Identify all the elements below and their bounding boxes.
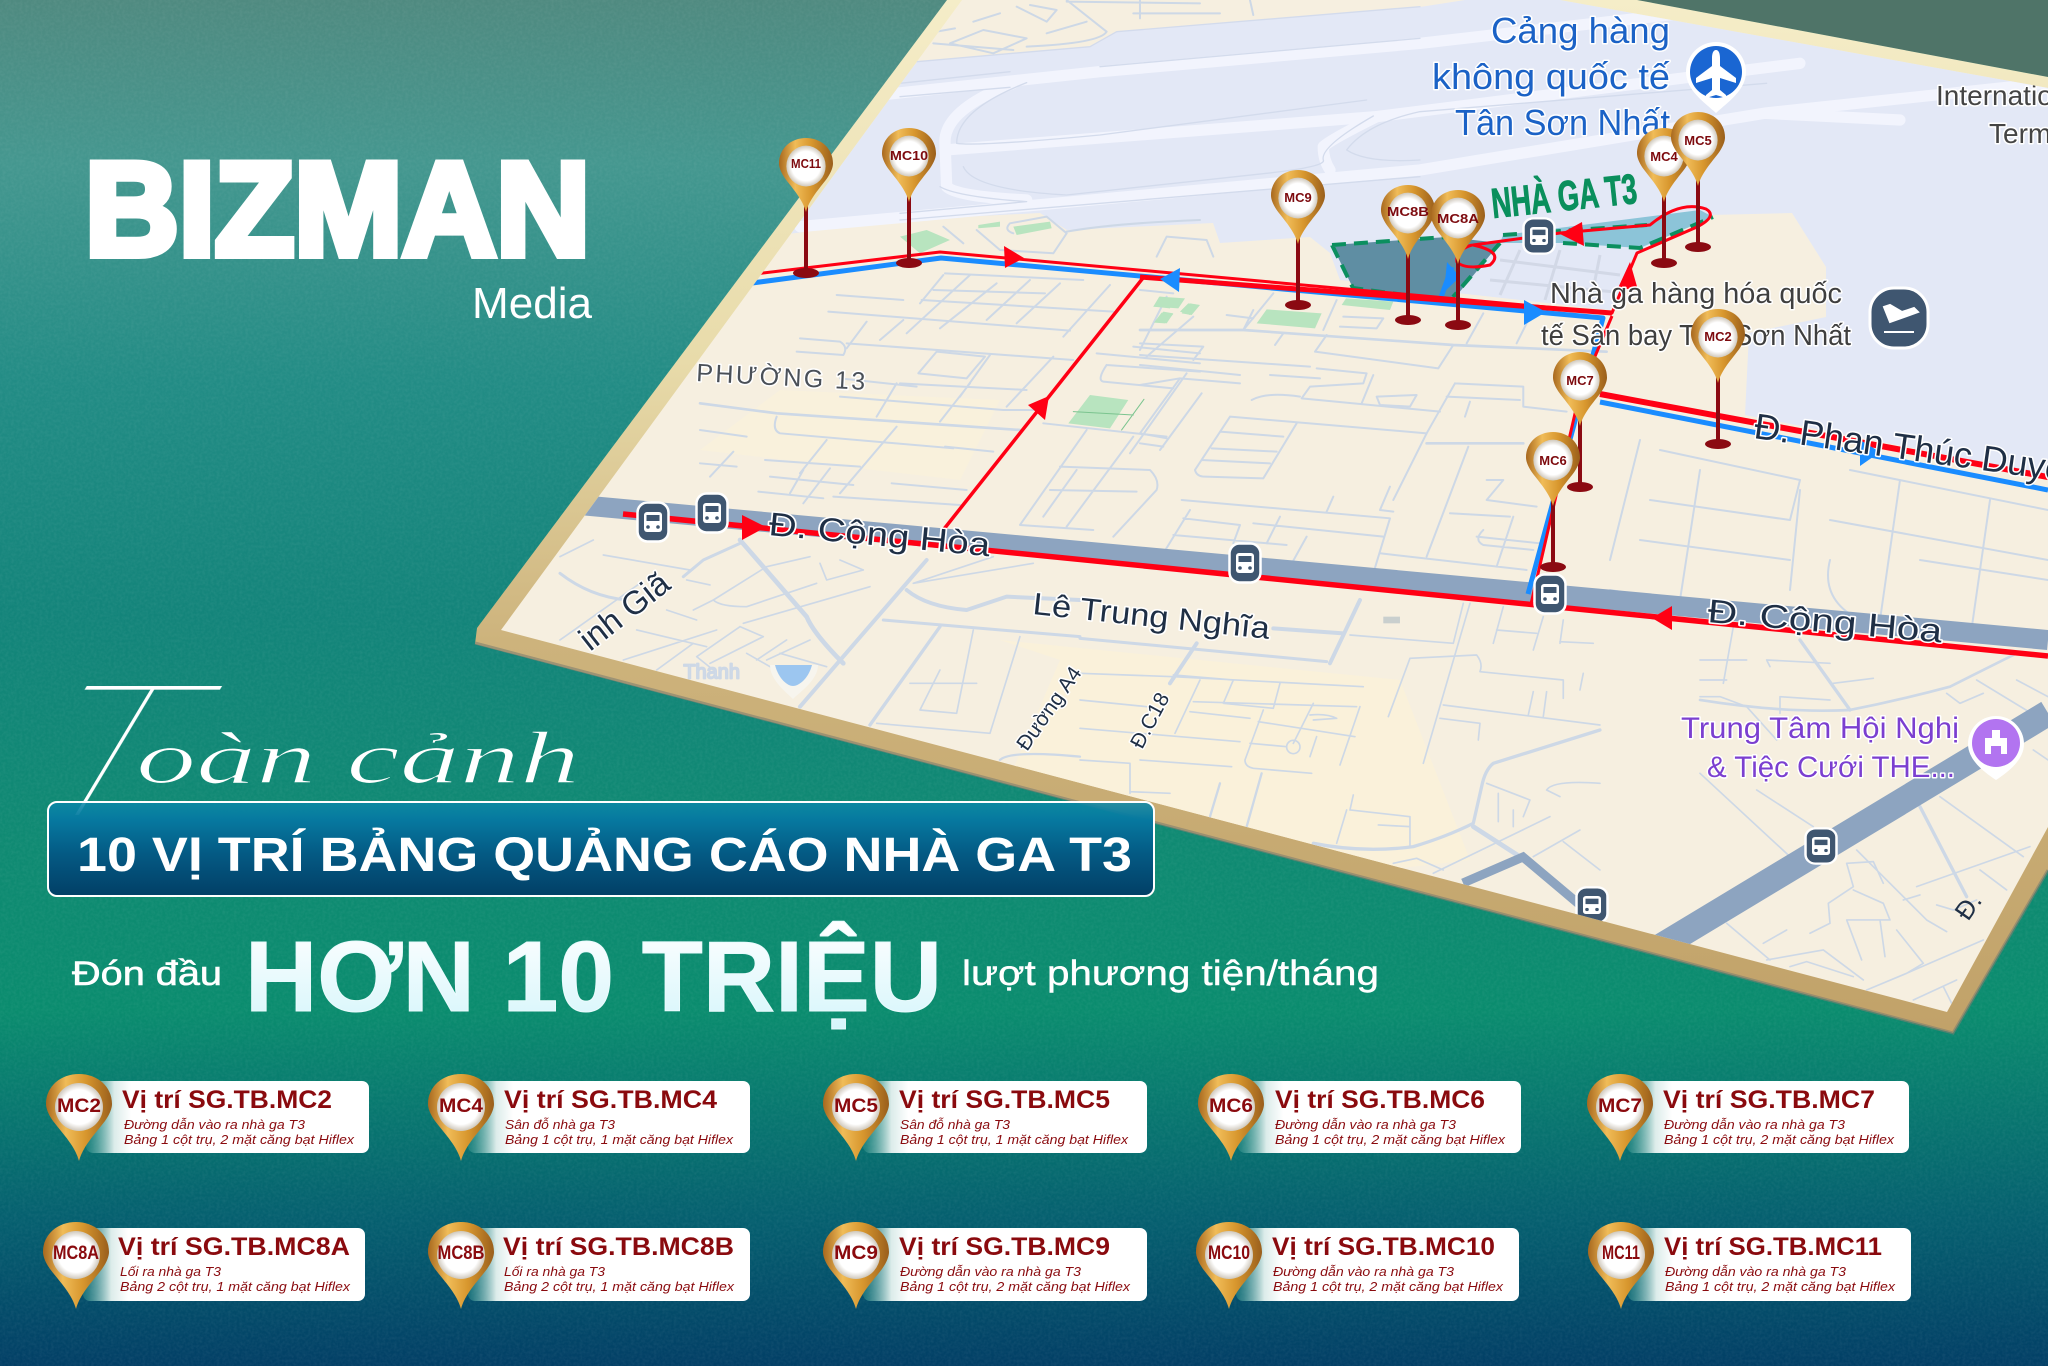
card MC8B: Bảng 2 cột trụ, 1 mặt căng bạt Hiflex [504, 1279, 735, 1294]
road and place labels [572, 10, 2048, 925]
card MC4: Vị trí SG.TB.MC4 [504, 1086, 717, 1114]
heading: Toàn cảnh [0, 636, 580, 865]
map pins [779, 112, 1745, 572]
card MC10: Bảng 1 cột trụ, 2 mặt căng bạt Hiflex [1273, 1279, 1504, 1294]
road and place labels: Lê Trung Nghĩa [1031, 586, 1272, 646]
pin MC9 [1271, 170, 1325, 310]
streets: north-east block [1140, 290, 1607, 573]
card MC9: Đường dẫn vào ra nhà ga T3 [900, 1264, 1082, 1279]
headline: đón đầu hơn 10 triệu: Đón đầu [72, 955, 222, 993]
road and place labels: & Tiệc Cưới THE... [1707, 751, 1955, 784]
card MC2: MC2 [57, 1096, 101, 1117]
card MC10: Vị trí SG.TB.MC10 [1272, 1233, 1495, 1261]
pin MC7: MC7 [1566, 373, 1594, 388]
card MC4: Sân đỗ nhà ga T3 [505, 1117, 616, 1132]
route arrows [742, 222, 1880, 630]
card MC2: Đường dẫn vào ra nhà ga T3 [124, 1117, 306, 1132]
runways and airport roads [800, 0, 2048, 257]
card MC10 [1196, 1222, 1519, 1309]
road and place labels: Đường A4 [1012, 662, 1087, 755]
icon: faint blue place marker [770, 665, 818, 699]
headline: đón đầu hơn 10 triệu: lượt phương tiện/tháng [962, 954, 1379, 993]
pin MC2 [1691, 309, 1745, 449]
card MC4: Bảng 1 cột trụ, 1 mặt căng bạt Hiflex [505, 1132, 734, 1147]
card MC2: Vị trí SG.TB.MC2 [122, 1086, 332, 1114]
pin MC10: MC10 [890, 148, 928, 163]
banner: 10 vị trí bảng quảng cáo [48, 802, 1154, 896]
pin MC6: MC6 [1539, 453, 1567, 468]
pin MC11: MC11 [791, 156, 821, 171]
icon: departures marker [1870, 288, 1928, 348]
card MC6: MC6 [1209, 1096, 1253, 1117]
streets: north-west block [700, 273, 1200, 537]
card MC2 [46, 1074, 369, 1161]
road and place labels: tế Sân bay Tân Sơn Nhất [1541, 320, 1851, 352]
card MC11 [1588, 1222, 1911, 1309]
card MC5: Vị trí SG.TB.MC5 [899, 1086, 1110, 1114]
card MC7: Vị trí SG.TB.MC7 [1663, 1086, 1875, 1114]
pin MC11 [779, 138, 833, 278]
pin MC8B: MC8B [1387, 204, 1429, 219]
airport area [780, 0, 2048, 475]
card MC11: MC11 [1602, 1243, 1640, 1264]
pin MC5 [1671, 112, 1725, 252]
card MC6: Đường dẫn vào ra nhà ga T3 [1275, 1117, 1457, 1132]
streets: south-east block [1700, 627, 2048, 1007]
routes [623, 207, 2048, 656]
pin MC4: MC4 [1650, 149, 1678, 164]
pin MC7 [1553, 352, 1607, 492]
card MC9: Vị trí SG.TB.MC9 [899, 1233, 1110, 1261]
road and place labels: inh Giã [572, 564, 677, 658]
card MC2: Bảng 1 cột trụ, 2 mặt căng bạt Hiflex [124, 1132, 355, 1147]
heading: Toàn cảnh: oàn cảnh [136, 718, 580, 800]
logo: BIZMAN Media: Media [472, 279, 593, 328]
card MC8B: Vị trí SG.TB.MC8B [503, 1233, 734, 1261]
card MC5: Bảng 1 cột trụ, 1 mặt căng bạt Hiflex [900, 1132, 1129, 1147]
card MC8B [428, 1222, 750, 1309]
headline: đón đầu hơn 10 triệu [72, 921, 1379, 1033]
card MC6 [1198, 1074, 1521, 1161]
green label: NHÀ GA T3: NHÀ GA T3 [1489, 165, 1639, 227]
streets: south-centre block [1080, 600, 1600, 873]
card MC8A: Vị trí SG.TB.MC8A [118, 1233, 350, 1261]
card MC7: Đường dẫn vào ra nhà ga T3 [1664, 1117, 1846, 1132]
card MC11: Bảng 1 cột trụ, 2 mặt căng bạt Hiflex [1665, 1279, 1896, 1294]
card MC10: MC10 [1208, 1243, 1250, 1264]
card MC8A [43, 1222, 365, 1309]
pin MC9: MC9 [1284, 190, 1312, 205]
card MC4 [428, 1074, 750, 1161]
road and place labels: Đ. [1948, 887, 1988, 925]
card MC6: Bảng 1 cột trụ, 2 mặt căng bạt Hiflex [1275, 1132, 1506, 1147]
headline: đón đầu hơn 10 triệu: HƠN 10 TRIỆU [245, 921, 942, 1033]
pin MC4 [1637, 128, 1691, 268]
road and place labels: Trung Tâm Hội Nghị [1681, 712, 1959, 745]
pin MC8B [1381, 185, 1435, 325]
road and place labels: Cảng hàng [1491, 10, 1670, 51]
card MC9: MC9 [834, 1243, 878, 1264]
pin MC8A [1431, 190, 1485, 330]
card MC7: MC7 [1598, 1096, 1642, 1117]
card MC5: Sân đỗ nhà ga T3 [900, 1117, 1011, 1132]
streets: south-west block: Thanh [683, 661, 740, 683]
pin MC8A: MC8A [1437, 211, 1480, 226]
terminal grid [1490, 250, 1620, 305]
streets: east of Phan Thuc Duyen junction [1610, 440, 2048, 640]
card MC8A: MC8A [53, 1243, 99, 1264]
card MC8B: MC8B [438, 1243, 484, 1264]
icon: purple venue marker [1968, 716, 2024, 780]
card MC9 [823, 1222, 1147, 1309]
card MC11: Đường dẫn vào ra nhà ga T3 [1665, 1264, 1847, 1279]
icon: airport marker [1686, 42, 1746, 113]
pin MC6 [1526, 432, 1580, 572]
card MC8A: Lối ra nhà ga T3 [120, 1264, 222, 1279]
road and place labels: Đ.C18 [1126, 689, 1174, 752]
road and place labels: Đ. Cộng Hòa [767, 505, 993, 563]
map [501, 0, 2048, 1012]
road and place labels: Nhà ga hàng hóa quốc [1550, 278, 1842, 310]
pin MC5: MC5 [1684, 133, 1712, 148]
banner: 10 vị trí bảng quảng cáo: 10 VỊ TRÍ BẢNG QUẢNG CÁO NHÀ GA T3 [77, 827, 1132, 882]
road and place labels: không quốc tế [1432, 56, 1670, 97]
map board frame [475, 0, 2048, 1033]
card MC9: Bảng 1 cột trụ, 2 mặt căng bạt Hiflex [900, 1279, 1131, 1294]
terminal T3 footprint [1332, 210, 1713, 300]
card MC6: Vị trí SG.TB.MC6 [1275, 1086, 1485, 1114]
road and place labels: PHƯỜNG 13 [696, 358, 866, 396]
card MC5 [823, 1074, 1147, 1161]
road and place labels: Tân Sơn Nhất [1455, 102, 1670, 143]
card MC5: MC5 [834, 1096, 878, 1117]
card MC8A: Bảng 2 cột trụ, 1 mặt căng bạt Hiflex [120, 1279, 351, 1294]
logo: BIZMAN Media: BIZMAN [85, 136, 590, 284]
icon: bus stops [638, 218, 1836, 923]
highways [580, 505, 2048, 950]
road and place labels: Đ. Cộng Hòa [1706, 592, 1945, 650]
pin MC2: MC2 [1704, 329, 1732, 344]
card MC8B: Lối ra nhà ga T3 [504, 1264, 606, 1279]
card MC7 [1587, 1074, 1909, 1161]
card MC7: Bảng 1 cột trụ, 2 mặt căng bạt Hiflex [1664, 1132, 1895, 1147]
card MC4: MC4 [439, 1096, 483, 1117]
card MC10: Đường dẫn vào ra nhà ga T3 [1273, 1264, 1455, 1279]
streets: south-west block [560, 540, 1080, 760]
card MC11: Vị trí SG.TB.MC11 [1664, 1233, 1882, 1261]
pin MC10 [882, 128, 936, 268]
